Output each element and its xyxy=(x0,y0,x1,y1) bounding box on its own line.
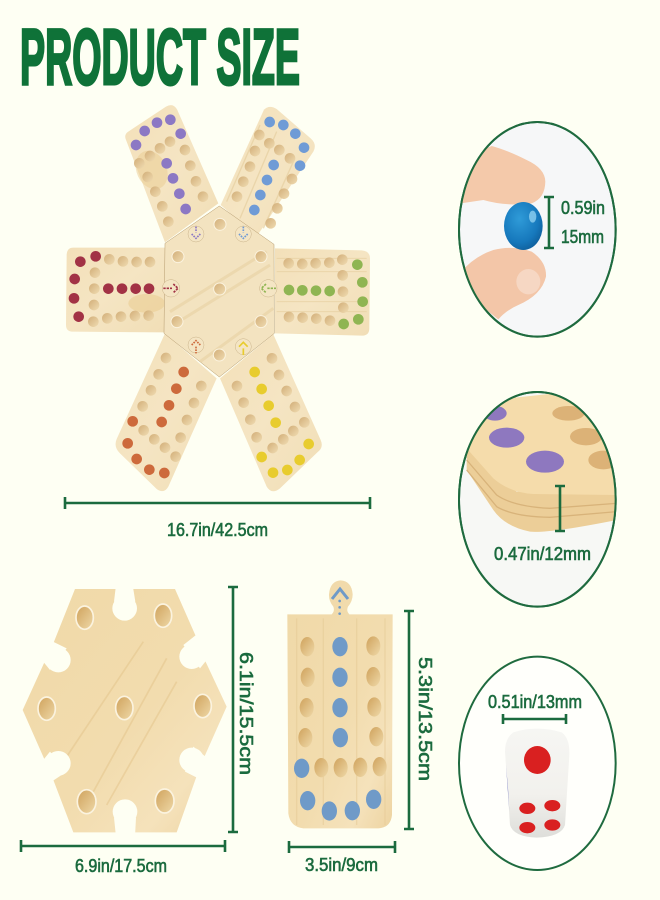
edge notches xyxy=(43,585,207,837)
arm: red xyxy=(66,248,165,332)
blue marble xyxy=(504,202,543,250)
arm: blue xyxy=(221,107,315,237)
assembled six-player game board xyxy=(66,105,370,491)
arm: orange xyxy=(116,333,217,491)
hexagon width dimension xyxy=(21,840,225,876)
arm: purple xyxy=(125,105,218,242)
white die xyxy=(505,729,569,838)
hexagon centre piece xyxy=(23,585,227,837)
arm: yellow xyxy=(220,334,322,491)
strip width dimension: 3.5in/9cm xyxy=(305,855,378,875)
blue marbles xyxy=(294,637,381,821)
lower finger xyxy=(460,248,546,319)
holes xyxy=(38,604,211,814)
strip height dimension xyxy=(404,611,435,829)
marble dimension: 0.59in xyxy=(561,198,605,218)
oval detail: marble xyxy=(457,122,616,337)
upper finger xyxy=(457,146,545,204)
die dimension xyxy=(488,692,582,724)
hexagon height dimension xyxy=(228,587,256,832)
marble dimension: 15mm xyxy=(561,227,604,247)
marble dimension xyxy=(544,197,605,248)
width dimension: full board: 16.7in/42.5cm xyxy=(167,520,268,540)
single arm strip piece xyxy=(287,580,393,828)
strip height dimension: 5.3in/13.5cm xyxy=(415,657,435,781)
centre hexagon xyxy=(162,206,277,377)
oval detail: board thickness xyxy=(459,387,618,607)
strip width dimension xyxy=(289,841,395,875)
arm: green xyxy=(275,248,370,336)
empty holes xyxy=(552,406,618,469)
empty holes xyxy=(298,636,387,777)
board side layers xyxy=(467,448,617,532)
strip arrow xyxy=(332,589,348,599)
hexagon height dimension: 6.1in/15.5cm xyxy=(236,652,256,775)
thickness dimension: 0.47in/12mm xyxy=(494,544,591,564)
board top surface xyxy=(467,387,617,495)
width dimension: full board xyxy=(65,497,370,540)
thickness dimension xyxy=(494,486,591,564)
hexagon width dimension: 6.9in/17.5cm xyxy=(75,856,167,876)
purple holes xyxy=(487,406,507,421)
red pips xyxy=(519,746,560,833)
oval detail: die xyxy=(459,657,616,870)
die dimension: 0.51in/13mm xyxy=(488,692,582,712)
infographic canvas: PRODUCT SIZE xyxy=(20,12,300,101)
arrows on notches xyxy=(163,227,276,355)
